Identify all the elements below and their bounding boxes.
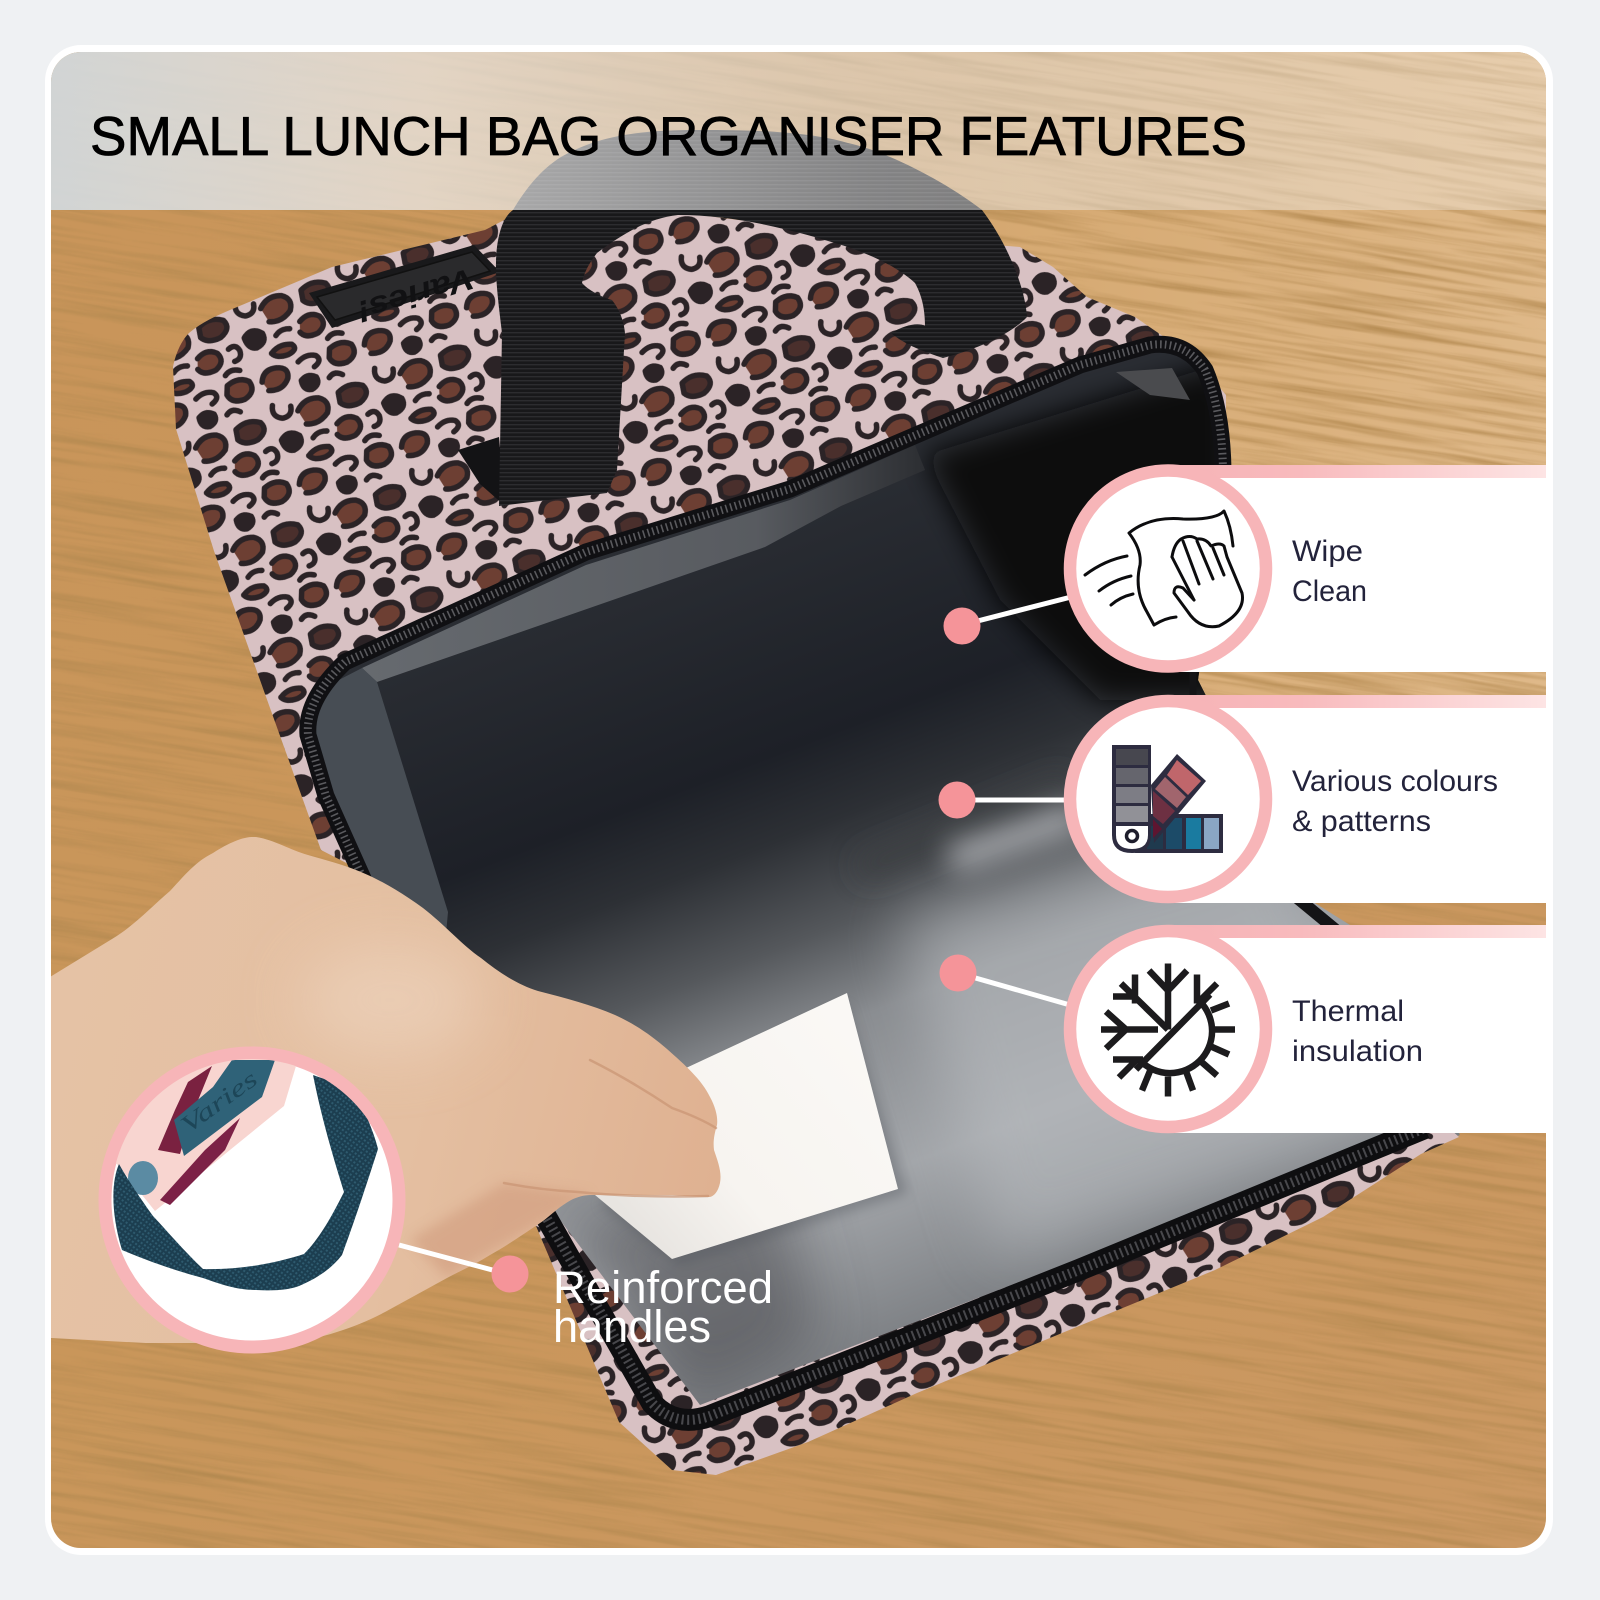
title: SMALL LUNCH BAG ORGANISER FEATURES [90, 105, 1247, 167]
label: Wipe [1292, 535, 1363, 568]
fold shadow [888, 850, 932, 868]
panel: wipe clean [1070, 465, 1546, 672]
label: Various colours [1292, 765, 1498, 798]
bag interior lining [300, 340, 1470, 1420]
palm shadow [413, 1184, 578, 1276]
label: Thermal [1292, 995, 1404, 1028]
panel: thermal insulation [1070, 925, 1546, 1133]
lens: reinforced handle close-up [100, 1050, 399, 1347]
blue blob [128, 1161, 158, 1195]
bag logo patch [309, 245, 500, 328]
callout pointer: colours [938, 782, 1070, 818]
label: & patterns [1292, 805, 1431, 838]
strap [113, 1075, 378, 1290]
carry handle [458, 130, 1027, 506]
dark shadow lower-left of lining [560, 1180, 820, 1410]
finger creases [504, 1060, 716, 1196]
callout pointer: handles [399, 1245, 528, 1292]
lid zipper [525, 1128, 1425, 1420]
top zipper [308, 344, 1336, 930]
left side wall [316, 668, 448, 928]
header translucent band [51, 52, 1546, 210]
icon: snowflake and sun [1101, 964, 1235, 1096]
icon: hand wiping with cloth [1085, 511, 1243, 627]
label [1292, 765, 1498, 838]
label: Clean [1292, 575, 1367, 608]
label tag: Varies [176, 1066, 263, 1139]
bag logo patch: Varies! [353, 261, 478, 328]
panel: various colours [1070, 695, 1546, 903]
corner wrinkle [1116, 368, 1190, 400]
callout pointer: thermal [940, 954, 1070, 1005]
label: insulation [1292, 1035, 1423, 1068]
label [1292, 535, 1367, 608]
bag outer leopard fabric [173, 209, 1226, 870]
callout pointer: wipe clean [944, 596, 1075, 644]
lid leopard edge [510, 1120, 1459, 1475]
label [1292, 995, 1423, 1068]
upper lining band [362, 445, 925, 682]
fold highlight [950, 815, 1080, 860]
hand [50, 837, 722, 1343]
caption: reinforced handles [553, 1262, 773, 1352]
tissue wipe [595, 993, 908, 1266]
lining highlight on right [900, 820, 1420, 1260]
fabric [100, 1050, 300, 1211]
black back corner [925, 360, 1232, 700]
caption: reinforced handles: handles [553, 1301, 711, 1352]
knuckle highlight [300, 945, 480, 1055]
maroon print [158, 1066, 212, 1154]
caption: reinforced handles: Reinforced [553, 1262, 773, 1313]
label tag [174, 1060, 275, 1156]
icon: colour swatch fan [1112, 745, 1223, 853]
